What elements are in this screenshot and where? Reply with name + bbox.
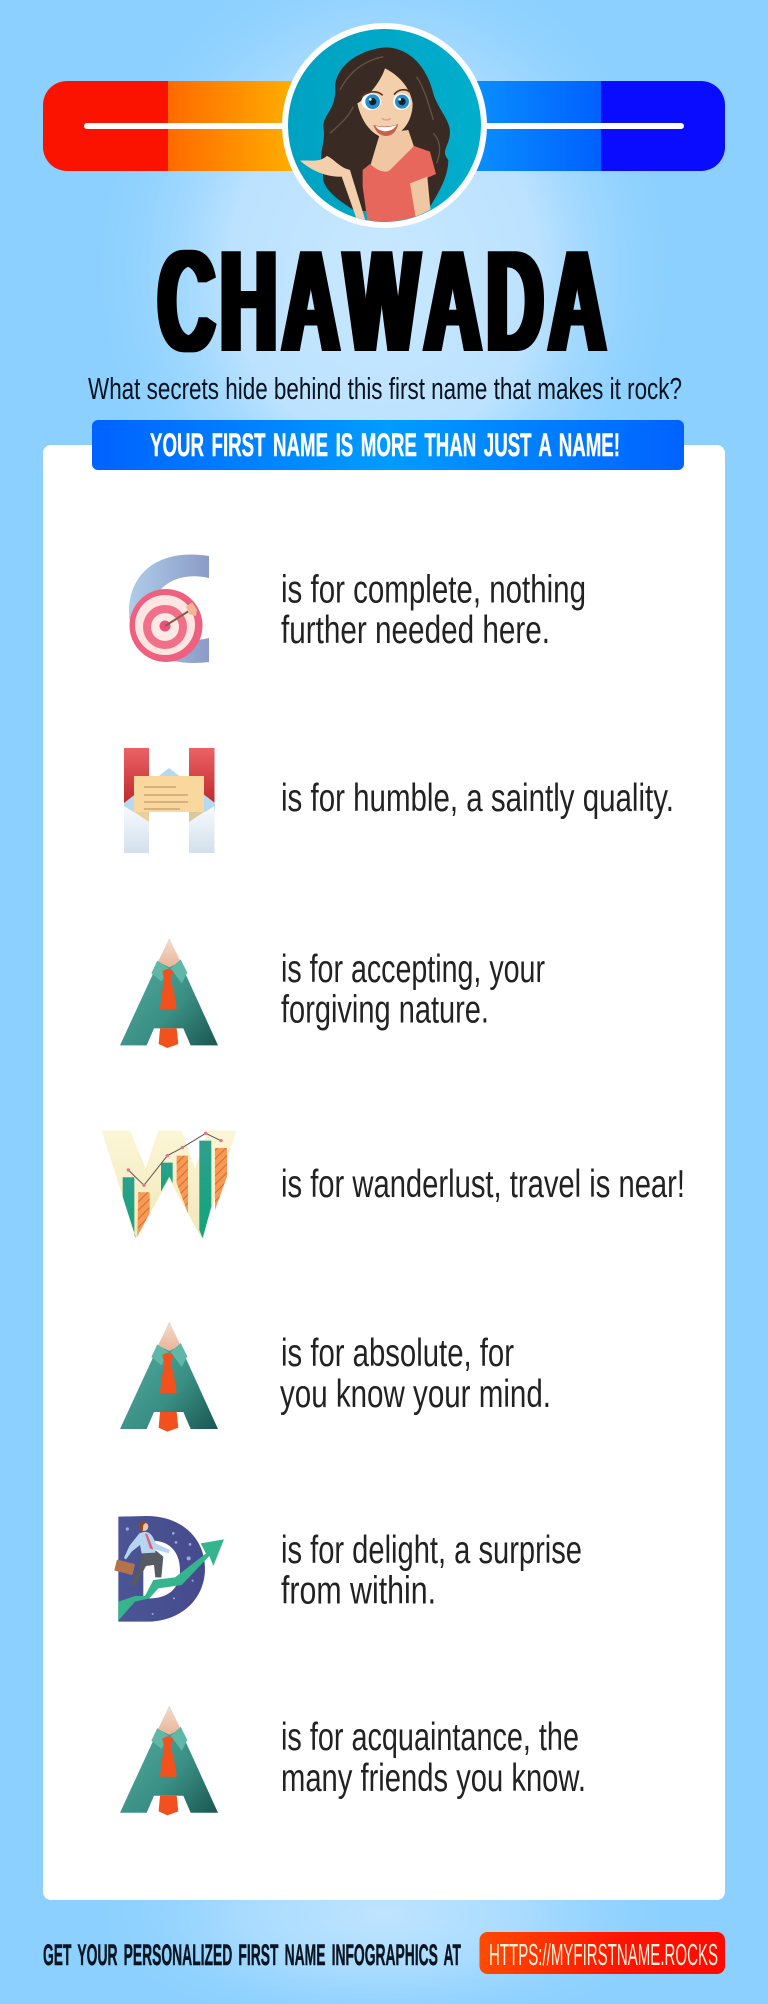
text: delight: is for delight, a surprise bbox=[281, 1529, 582, 1572]
row: W for wanderlust bbox=[102, 1131, 685, 1238]
icon: letter W with bar chart bbox=[102, 1131, 237, 1238]
text: complete bbox=[281, 568, 586, 652]
row: A for absolute bbox=[120, 1322, 551, 1432]
portrait medallion bbox=[282, 23, 487, 228]
icon: letter A with tie bbox=[120, 1322, 218, 1432]
text: acquaintance: is for acquaintance, the bbox=[281, 1716, 579, 1759]
icon: letter H with envelope bbox=[124, 748, 215, 853]
text: acquaintance: many friends you know. bbox=[281, 1757, 586, 1800]
text: accepting bbox=[281, 948, 545, 1032]
icon: letter A with tie bbox=[120, 938, 218, 1048]
white content panel bbox=[43, 445, 725, 1900]
icon: letter A with tie bbox=[120, 1706, 218, 1815]
banner bbox=[92, 420, 684, 470]
text: delight: from within. bbox=[281, 1570, 436, 1612]
illustration: woman with long brown hair bbox=[300, 47, 450, 227]
row: A for acquaintance bbox=[120, 1706, 586, 1815]
row: C for complete bbox=[129, 554, 586, 663]
text: accepting: forgiving nature. bbox=[281, 988, 489, 1032]
header colour bar bbox=[43, 81, 725, 171]
text: absolute: is for absolute, for bbox=[281, 1332, 514, 1375]
text: complete: further needed here. bbox=[281, 609, 550, 652]
row: D for delight bbox=[114, 1516, 582, 1622]
text: absolute bbox=[280, 1332, 551, 1416]
text: delight bbox=[281, 1529, 582, 1612]
text: absolute: you know your mind. bbox=[280, 1373, 551, 1416]
text: complete: is for complete, nothing bbox=[281, 568, 586, 612]
icon: letter D with man on arrow bbox=[114, 1516, 224, 1622]
icon: letter C with target bbox=[129, 554, 209, 663]
text: acquaintance bbox=[281, 1716, 586, 1800]
row: H for humble bbox=[124, 748, 674, 853]
row: A for accepting bbox=[120, 938, 545, 1048]
text: accepting: is for accepting, your bbox=[281, 948, 545, 991]
footer url button bbox=[480, 1932, 725, 1974]
